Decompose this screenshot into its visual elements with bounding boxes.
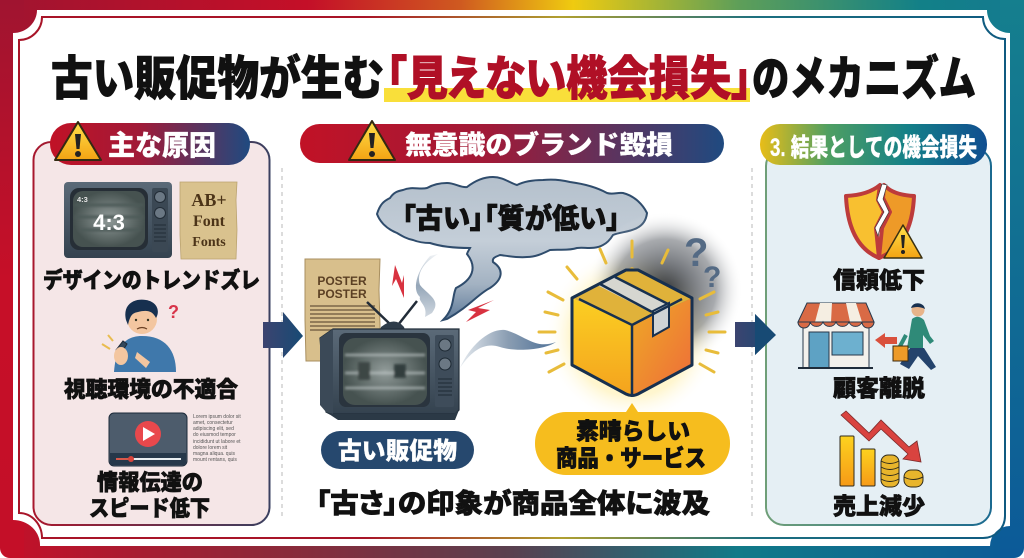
rays: [539, 241, 725, 372]
old TV: [320, 301, 459, 420]
video side text: Lorem ipsum dolor sit: [193, 414, 241, 420]
video side text: amet, consectetur: [193, 420, 233, 426]
product box with glow: ?: [703, 261, 721, 294]
results header pill: [760, 124, 987, 165]
icon: old 4:3 TV: [64, 182, 172, 258]
arrow: damage to results: [735, 314, 776, 355]
label pill: great product: 素晴らしい: [576, 418, 690, 444]
causes header pill: [50, 123, 250, 165]
icon: declining sales chart: [840, 411, 923, 487]
video side text: adipiscing elit, sed: [193, 426, 234, 432]
icon: video player: [109, 413, 187, 466]
icon: lightning bolt: [466, 300, 494, 322]
damage header pill: [300, 124, 724, 163]
icon: warning triangle: [55, 122, 101, 160]
label: loss of trust: 信頼低下: [833, 267, 925, 293]
panel: causes: [34, 122, 270, 525]
divider lines: [282, 168, 752, 520]
product box with glow: [539, 212, 743, 423]
video side text: magna aliqua. quis: [193, 451, 235, 457]
title text: 古い販促物が生む: [51, 52, 384, 105]
icon: old font poster: Fonts: [192, 235, 226, 250]
old poster: [305, 259, 380, 361]
icon: old 4:3 TV: 4:3: [77, 195, 88, 204]
arrow overlay on results panel: [755, 314, 776, 355]
icon: broken shield: [846, 184, 922, 258]
video side text: dolore lorem sit: [193, 445, 228, 451]
question marks: ?: [684, 231, 708, 275]
label: slower information delivery: [89, 470, 210, 521]
title highlight underline: [384, 88, 750, 102]
label pill: great product: [535, 403, 730, 475]
results panel body: [766, 148, 991, 525]
box faces: [572, 298, 632, 397]
causes heading: 主な原因: [108, 130, 216, 161]
icon: confused person with phone: ?: [168, 302, 179, 322]
label: design trend gap: デザインのトレンドズレ: [43, 268, 260, 293]
causes panel body: [34, 142, 270, 525]
speech cloud: [377, 177, 647, 320]
label pill: old promo: 古い販促物: [338, 438, 457, 465]
label: slower information delivery: 情報伝達の: [97, 470, 203, 495]
video side text: [193, 414, 241, 463]
icon: old font poster: [180, 182, 237, 259]
label pill: old promo: [321, 431, 474, 469]
icon: old font poster: AB+: [191, 190, 227, 210]
walker: [912, 304, 924, 316]
smoke stream to product: [460, 330, 556, 368]
video side text: incididunt ut labore et: [193, 439, 241, 445]
icon: warning triangle: [349, 121, 395, 160]
video side text: mount rentans, quis: [193, 457, 237, 463]
title: [51, 52, 976, 105]
icon: old font poster: Font: [193, 213, 226, 230]
label: viewing environment mismatch: 視聴環境の不適合: [64, 377, 238, 402]
icon: lightning bolt: [392, 265, 404, 298]
title red emphasis: 「見えない機会損失」: [386, 52, 752, 105]
smoke wisp: [416, 254, 438, 317]
cloud text: 「古い」「質が低い」: [402, 202, 620, 234]
video side text: do eiusmod tempor: [193, 432, 236, 438]
icon: old 4:3 TV: 4:3: [93, 210, 125, 235]
damage heading: 無意識のブランド毀損: [405, 130, 673, 160]
icon: store with customer leaving: [798, 303, 936, 370]
arrow: [875, 333, 897, 348]
arrow: causes to damage: [263, 312, 303, 358]
caption: 「古さ」の印象が商品全体に波及: [316, 488, 710, 519]
panel: brand damage: [300, 121, 743, 519]
label: customer churn: 顧客離脱: [833, 375, 925, 401]
label: slower information delivery: スピード低下: [89, 496, 210, 521]
panel: results: [755, 124, 991, 525]
label pill: great product: 商品・サービス: [556, 445, 706, 471]
label: sales decline: 売上減少: [833, 493, 925, 519]
old poster: POSTER: [317, 287, 367, 301]
old poster: POSTER: [317, 274, 367, 288]
icon: confused person with phone: [102, 300, 179, 372]
